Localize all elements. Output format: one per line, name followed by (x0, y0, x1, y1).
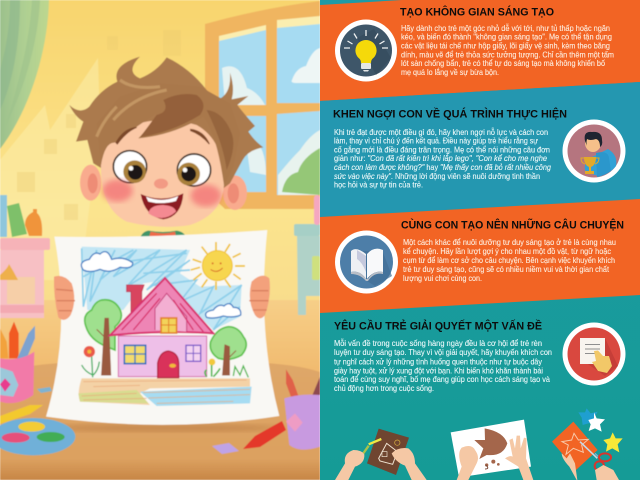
ground scribble (78, 378, 252, 406)
body text: chủ động hơn trong cuộc sống. (334, 383, 434, 393)
fringe (100, 91, 225, 184)
clouds (81, 252, 241, 318)
red crayon (243, 421, 286, 449)
mouth (141, 193, 183, 219)
body text: Khi trẻ đạt được một điều gì đó, hãy khen ngợi nỗ lực và cách con (334, 127, 548, 137)
table shadow (50, 424, 280, 432)
sky scribble (82, 247, 242, 330)
collar (140, 230, 185, 237)
body text (334, 338, 552, 393)
paint palette (0, 418, 75, 455)
icon: light bulb (335, 20, 397, 82)
craft: brown scratch card (335, 429, 427, 480)
icon: open book (335, 230, 398, 294)
body text: học hỏi và sự tự tin của trẻ. (334, 180, 423, 190)
body text: cách con làm được không?" hay "Mẹ thấy con đã bỏ rất nhiều công (334, 162, 551, 172)
body text: Một cách khác để nuôi dưỡng tư duy sáng tạo ở trẻ là cùng nhau (403, 237, 616, 247)
band: section 3 orange (320, 199, 640, 313)
body text: tự nghĩ cách xử lý những tình huống quen thuộc như tự buộc dây (334, 356, 543, 366)
paper sheet (46, 230, 279, 425)
sun (191, 242, 245, 290)
body text (403, 237, 616, 283)
body text: luyện tư duy sáng tạo. Thay vì vội giải quyết, hãy khuyến khích con (334, 347, 552, 357)
icon: hand tapping document (562, 322, 626, 386)
heading: KHEN NGỢI CON VỀ QUÁ TRÌNH THỰC HIỆN (333, 108, 567, 120)
body text (401, 23, 614, 77)
left cup with pencils (0, 322, 35, 403)
body text: dính, màu vẽ để trẻ thỏa sức tưởng tượng. Chỉ cần thêm một tấm (401, 49, 614, 59)
illustration: boy holding his drawing (0, 0, 320, 480)
nose (154, 179, 168, 189)
illustration: children's hands doing crafts (335, 408, 623, 480)
body text: các vật liệu tái chế như hộp giấy, lõi giấy vệ sinh, kèm theo băng (401, 40, 610, 50)
floor (0, 300, 320, 380)
body text: lượng vui chơi cùng con. (403, 273, 482, 283)
cheeks (102, 180, 133, 202)
ears (80, 165, 247, 210)
left pink shelf (0, 195, 50, 318)
body text: sức vào việc này". Những lời động viên sẽ nuôi dưỡng tinh thần (334, 171, 540, 181)
body text: mẹ quá lo lắng về sự bừa bộn. (401, 67, 499, 77)
heading: CÙNG CON TẠO NÊN NHỮNG CÂU CHUYỆN (401, 218, 624, 232)
yellow crayon (0, 405, 43, 424)
body text: trẻ tư duy sáng tạo, cũng sẽ có nhiều niềm vui và thời gian chất (403, 264, 610, 274)
right panel background (320, 0, 640, 480)
section: cùng con tạo nên những câu chuyện (335, 218, 624, 294)
trees (85, 300, 246, 375)
heading: YÊU CẦU TRẺ GIẢI QUYẾT MỘT VẤN ĐỀ (334, 320, 543, 332)
section: tạo không gian sáng tạo (335, 6, 614, 82)
icon: child with trophy (562, 120, 626, 182)
body text (334, 127, 551, 190)
wall squares (17, 114, 78, 220)
band: section 1 orange (320, 0, 640, 101)
curtain (0, 0, 49, 149)
body text: Hãy dành cho trẻ một góc nhỏ dễ với tới, như tủ thấp hoặc ngăn (401, 23, 610, 33)
band: section 2 teal (320, 82, 640, 217)
window (205, 1, 320, 209)
right teal shelf (294, 195, 320, 315)
section: yêu cầu trẻ giải quyết (334, 320, 626, 393)
house (110, 278, 213, 378)
craft: paper fish (451, 420, 533, 480)
flowers and grass (82, 346, 248, 377)
eyebrows (116, 127, 137, 144)
boy (69, 57, 263, 240)
hair back (69, 57, 263, 188)
body text: giày hay tuột, xử lý xung đột với bạn. Khi biến khó khăn thành bài (334, 366, 543, 376)
body text: cố gắng mới là điều đáng trân trọng. Mẹ có thể nói những câu đơn (334, 144, 550, 154)
wall light patch (0, 58, 100, 280)
child's drawing (46, 230, 279, 425)
body text: lót sàn chống bẩn, trẻ có thể tự do sáng tạo mà không khiến bố (401, 58, 605, 68)
craft: orange paper star (552, 422, 619, 480)
hands (54, 276, 270, 320)
face (101, 120, 224, 227)
purple paper scrap (212, 443, 239, 454)
body text: Mỗi vấn đề trong cuộc sống hàng ngày đều là cơ hội để trẻ rèn (334, 338, 542, 348)
table (0, 362, 320, 480)
body text: giản như: "Con đã rất kiên trì khi lắp lego", "Con kể cho mẹ nghe (334, 153, 547, 163)
body text: làm, thay vì chỉ chú ý đến kết quả. Điều này giúp trẻ hiểu rằng sự (334, 136, 538, 146)
eye left (113, 151, 147, 183)
blue paper scrap (37, 387, 52, 393)
body text: toán để cùng suy nghĩ, bố mẹ đang giúp con học cách sáng tạo và (334, 374, 550, 384)
room wall (0, 0, 320, 320)
heading: TẠO KHÔNG GIAN SÁNG TẠO (400, 6, 554, 18)
body text: kéo, và biến đó thành "không gian sáng tạo". Mẹ có thể tận dụng (401, 32, 612, 42)
paper stars (578, 408, 623, 452)
section: khen ngợi con (333, 108, 626, 190)
right cup with crayons (284, 369, 320, 450)
eye right (177, 154, 211, 186)
body text: kể chuyện. Hãy lần lượt gợi ý cho nhau một đồ vật, từ ngữ hoặc (403, 246, 611, 256)
